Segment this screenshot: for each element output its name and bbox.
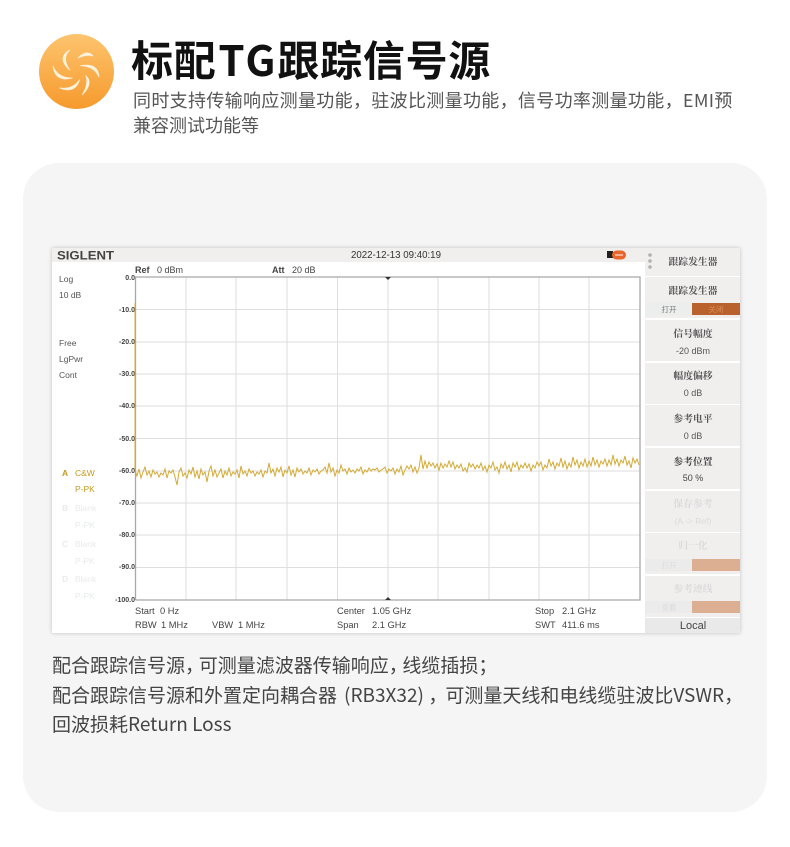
bottom readouts: 411.6 ms — [562, 620, 600, 630]
header readouts: 20 dB — [292, 265, 316, 275]
softkey menu: 50 % — [683, 473, 703, 483]
softkey menu: 参考位置 — [673, 454, 713, 468]
y axis labels: -70.0 — [119, 500, 135, 507]
top status bar: 2022-12-13 09:40:19 — [351, 250, 441, 261]
title: 标配TG跟踪信号源 — [131, 28, 491, 89]
softkey menu: 归一化 — [678, 538, 708, 552]
y axis labels: -80.0 — [119, 532, 135, 539]
body text — [52, 651, 743, 737]
trace legend: P-PK — [75, 484, 95, 494]
bottom readouts — [135, 606, 600, 630]
softkey menu: 保存参考 — [673, 496, 713, 510]
panel: spectrum analyzer screenshot — [52, 248, 740, 633]
trace legend: P-PK — [75, 591, 95, 601]
bottom readouts: RBW — [135, 620, 157, 630]
top status bar — [52, 248, 645, 262]
y axis labels — [115, 275, 135, 604]
bottom readouts: SWT — [535, 620, 556, 630]
trace legend: B — [62, 503, 68, 513]
softkey menu: 参考迹线 — [673, 581, 713, 595]
softkey menu: 打开 — [662, 304, 677, 314]
body text: 配合跟踪信号源 可测量滤波器传输响应 线缆插损； — [52, 651, 497, 678]
y axis labels: -10.0 — [119, 307, 135, 314]
icon: orange swirl — [39, 34, 114, 109]
left status labels: Cont — [59, 370, 78, 380]
bottom readouts: 2.1 GHz — [562, 606, 596, 616]
bottom readouts: VBW — [212, 620, 233, 630]
trace legend: C — [62, 539, 68, 549]
bottom readouts: 1 MHz — [161, 620, 188, 630]
softkey menu: 幅度偏移 — [673, 368, 713, 382]
trace legend: Blank — [75, 539, 97, 549]
left status labels: LgPwr — [59, 354, 83, 364]
header readouts: Ref — [135, 265, 151, 275]
body text: 配合跟踪信号源和外置定向耦合器 (RB3X32) 可测量天线和电线缆驻波比VSWR， — [52, 680, 743, 708]
softkey menu: 关闭 — [708, 304, 724, 314]
header readouts: 0 dBm — [157, 265, 183, 275]
softkey menu: 信号幅度 — [673, 326, 713, 340]
spectrum trace — [135, 303, 639, 485]
top status bar: SIGLENT — [57, 248, 115, 262]
trace legend: A — [62, 468, 68, 478]
bottom readouts: 1 MHz — [238, 620, 265, 630]
bottom readouts: 2.1 GHz — [372, 620, 406, 630]
chart grid — [135, 277, 640, 600]
y axis labels: -60.0 — [119, 468, 135, 475]
softkey menu: Local — [680, 620, 706, 632]
body text: ， — [428, 680, 447, 708]
bottom readouts: 0 Hz — [160, 606, 179, 616]
y axis labels: -20.0 — [119, 339, 135, 346]
softkey menu: 打开 — [662, 560, 677, 570]
subtitle: 兼容测试功能等 — [133, 112, 259, 138]
subtitle: 同时支持传输响应测量功能，驻波比测量功能，信号功率测量功能，EMI预 — [133, 87, 733, 113]
left status labels: Free — [59, 338, 77, 348]
subtitle — [133, 87, 733, 138]
left status labels: Log — [59, 274, 73, 284]
trace legend: P-PK — [75, 556, 95, 566]
bottom readouts: Span — [337, 620, 359, 630]
body text: 回波损耗Return Loss — [52, 710, 231, 737]
softkey menu — [645, 248, 740, 633]
trace legend: Blank — [75, 503, 97, 513]
y axis labels: -30.0 — [119, 371, 135, 378]
y axis labels: -50.0 — [119, 436, 135, 443]
softkey menu: 0 dB — [684, 388, 702, 398]
softkey menu: 参考电平 — [673, 411, 713, 425]
bottom readouts: Center — [337, 606, 365, 616]
left status labels — [59, 274, 83, 380]
trace legend: Blank — [75, 574, 97, 584]
bottom readouts: Stop — [535, 606, 554, 616]
bottom readouts: Start — [135, 606, 155, 616]
panel: content card — [23, 163, 767, 812]
trace legend: C&W — [75, 468, 95, 478]
y axis labels: -90.0 — [119, 564, 135, 571]
y axis labels: -100.0 — [115, 597, 135, 604]
bottom readouts: 1.05 GHz — [372, 606, 412, 616]
y axis labels: 0.0 — [125, 275, 135, 282]
header readouts: Att — [272, 265, 284, 275]
softkey menu: 0 dB — [684, 431, 702, 441]
softkey menu: -20 dBm — [676, 346, 710, 356]
softkey menu: 跟踪发生器 — [669, 283, 718, 297]
y axis labels: -40.0 — [119, 403, 135, 410]
softkey menu: (A -> Ref) — [675, 516, 711, 526]
center markers — [385, 277, 391, 600]
body text: ， — [389, 651, 408, 678]
softkey menu: 查看 — [662, 602, 677, 612]
trace legend — [62, 468, 97, 601]
trace legend: P-PK — [75, 520, 95, 530]
left status labels: 10 dB — [59, 290, 82, 300]
body text: ， — [185, 651, 204, 678]
softkey menu: 跟踪发生器 — [669, 254, 718, 268]
trace legend: D — [62, 574, 68, 584]
header readouts — [135, 265, 316, 275]
